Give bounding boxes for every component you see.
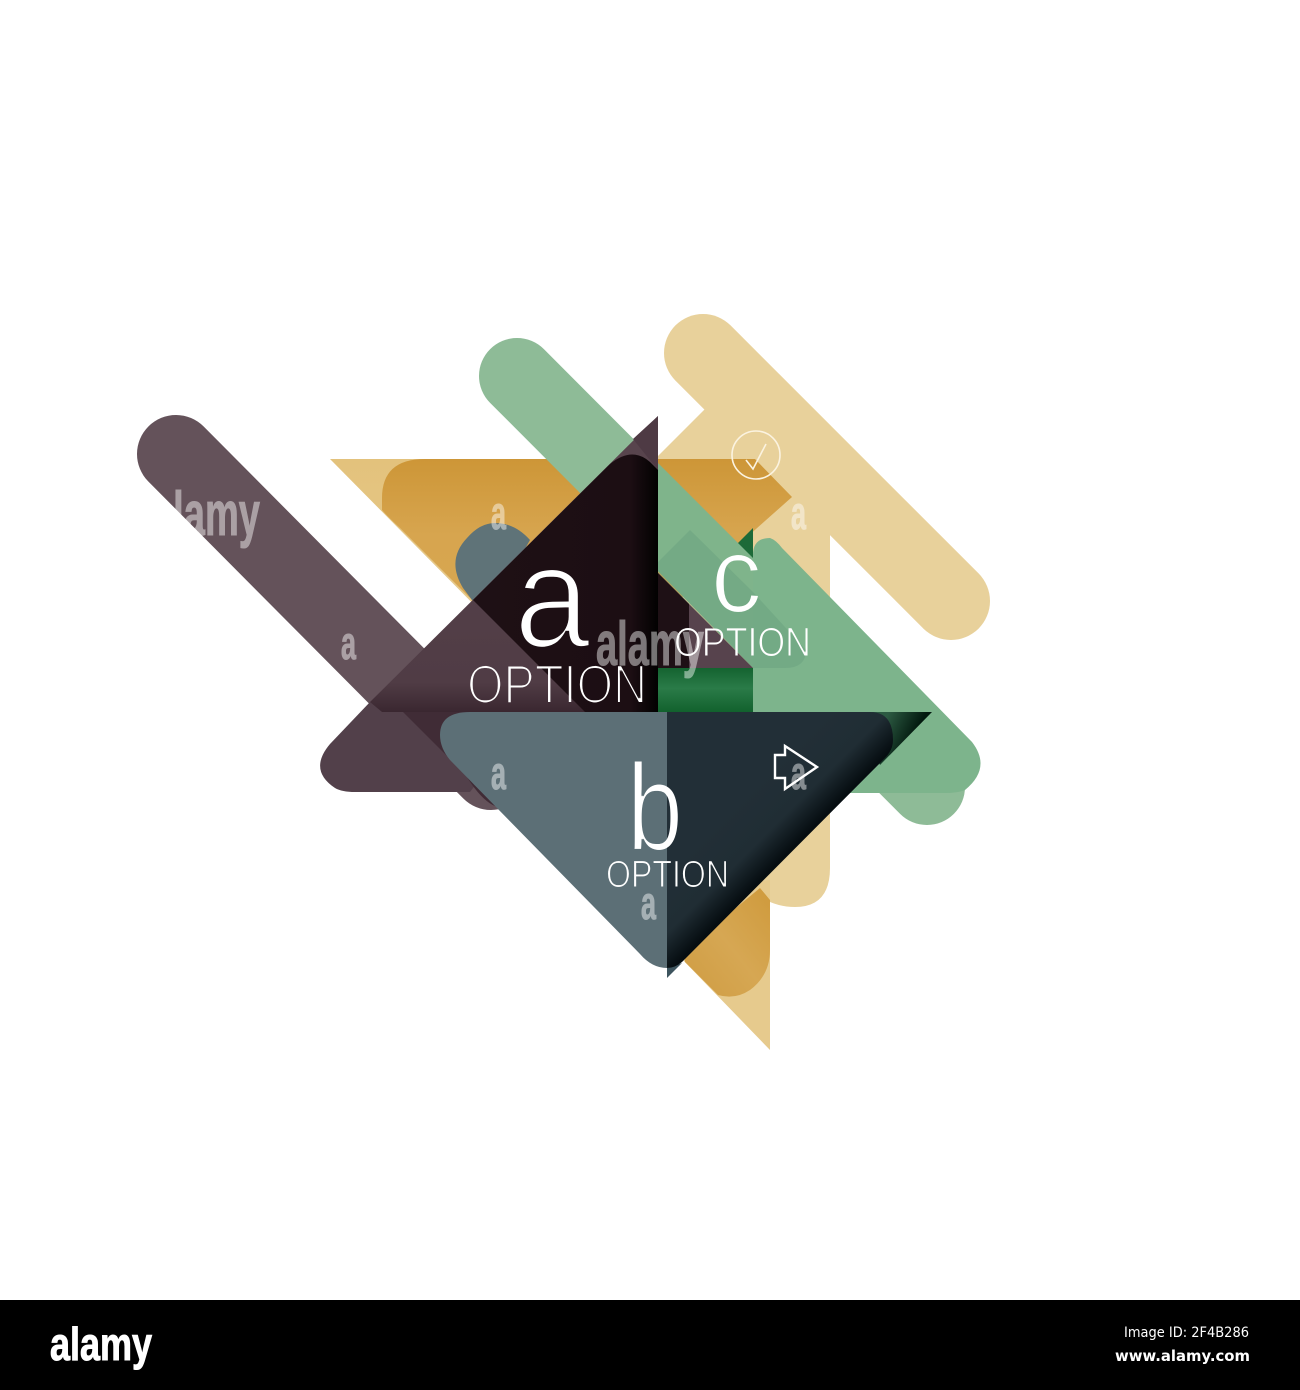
shape: main plum triangle: [370, 416, 658, 712]
letter c: c: [711, 514, 762, 635]
letter b: b: [627, 740, 683, 877]
watermarks: small a: a: [491, 747, 506, 799]
shape: black inner triangle: [473, 454, 658, 712]
watermarks: small a: a: [641, 877, 656, 929]
bar: green diagonal: [517, 376, 927, 787]
shape: lower plum triangle: [320, 702, 530, 792]
shape: green bar right segment: [658, 463, 753, 668]
shape: plum lower blob: [403, 712, 560, 808]
label: option a: OPTION: [467, 653, 647, 715]
bar: plum diagonal: [176, 454, 491, 771]
footer: url: www.alamy.com: [1115, 1347, 1250, 1365]
watermark: alamy centre: alamy: [596, 610, 704, 679]
shape: light tan top triangle: [330, 459, 755, 712]
graphic: geometric option composition: [152, 353, 981, 1050]
shape: slate blob: [455, 523, 530, 610]
letter a: a: [514, 515, 591, 678]
shape: plum triangle right of centre: [658, 573, 753, 668]
footer bar: [0, 1300, 1300, 1390]
block: dark green rectangle: [658, 668, 753, 713]
label: option c: OPTION: [674, 619, 811, 665]
label: option b: OPTION: [606, 854, 729, 896]
watermark: alamy left: alamy: [152, 480, 260, 549]
shape: muted green pentagon: [658, 530, 806, 668]
shape: black part of plum triangle: [658, 573, 689, 668]
panel: slate triangle right half: [667, 712, 893, 968]
icon: check in circle: [732, 431, 780, 479]
watermarks: small a: a: [491, 487, 506, 539]
shape: dark green tip: [736, 528, 753, 562]
shape: green rounded triangle: [753, 538, 981, 793]
shape: lower tan rounded tail: [620, 880, 770, 1050]
shape: top dark strip of triangle: [633, 416, 658, 470]
bar: tan diagonal: [703, 353, 951, 601]
shape: slate triangle tip: [667, 963, 682, 978]
shape: light tan rounded triangle: [657, 393, 830, 907]
panel: slate triangle left half: [440, 712, 667, 968]
footer logo: alamy: alamy: [50, 1318, 152, 1370]
icon: outlined arrow: [775, 746, 817, 789]
shape: dark green right corner: [860, 712, 932, 765]
watermarks: small a: a: [791, 487, 806, 539]
watermarks: small a: [341, 487, 806, 929]
shape: gold rounded overlap: [382, 459, 792, 712]
watermarks: small a: a: [341, 617, 356, 669]
footer: image id: Image ID: 2F4B286: [1124, 1325, 1249, 1341]
watermarks: small a: a: [791, 747, 806, 799]
shape: lower gold blob: [685, 888, 770, 997]
